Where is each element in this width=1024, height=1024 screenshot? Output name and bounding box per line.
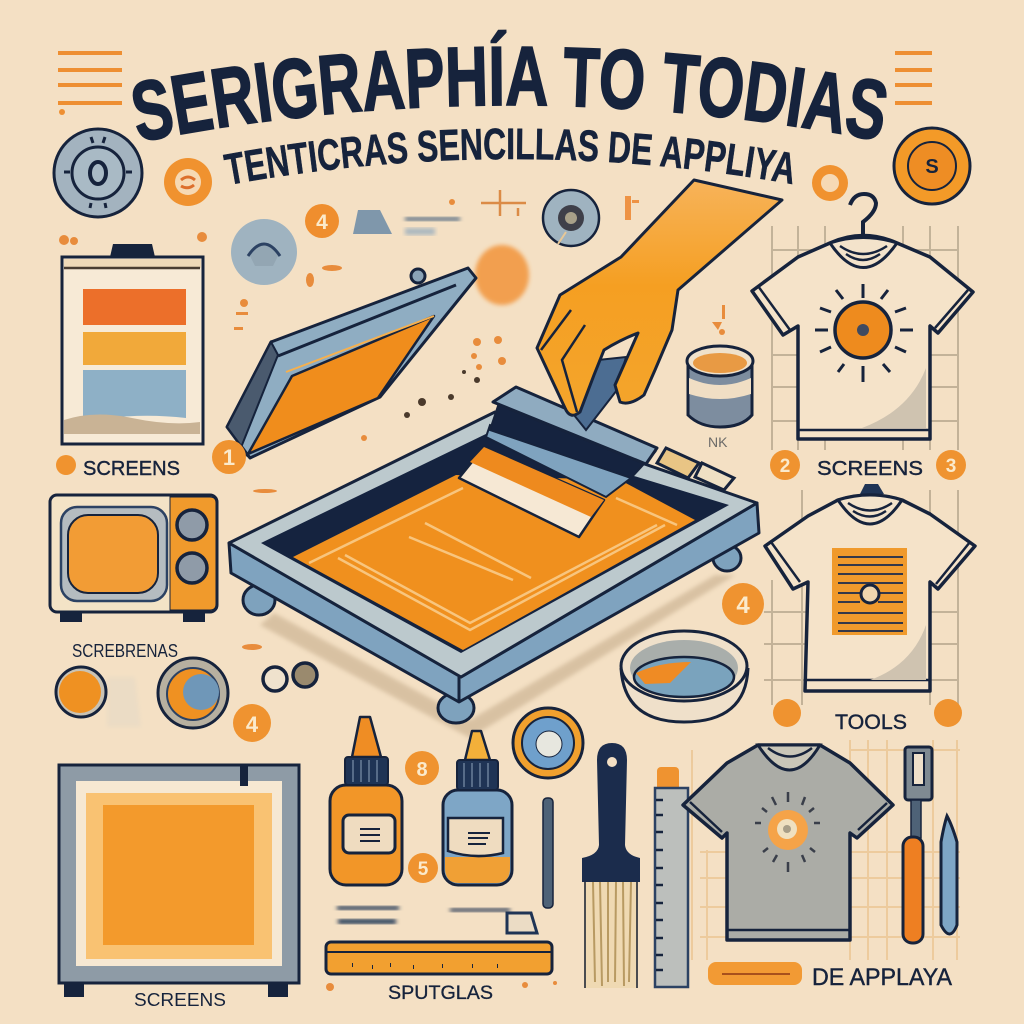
step badge 4 [233, 704, 271, 742]
icon: small clamp [353, 210, 460, 235]
dark specks [404, 370, 480, 418]
step badge 4 top: 4 [316, 211, 328, 234]
icon: small rings [263, 663, 317, 691]
icons: tape rolls [56, 658, 228, 728]
step badge 3: 3 [946, 456, 956, 477]
label: tools: TOOLS [835, 711, 907, 734]
panel: t-shirt with sun [752, 194, 973, 439]
icon: blue bottle [443, 731, 512, 885]
step badge 2: 2 [780, 456, 790, 477]
step badge 4 right: 4 [736, 592, 750, 619]
panel: framed screen [59, 765, 299, 997]
step badge 3 [936, 450, 966, 480]
icon: spiral disc [543, 190, 599, 246]
decorative header lines left [58, 51, 122, 115]
icon: orange bottle [330, 717, 402, 885]
orange blur spot [475, 245, 529, 305]
icon: ink bowl [621, 631, 748, 722]
icon: ink jar: NK [708, 434, 728, 450]
label: screens left [56, 455, 180, 480]
hand [537, 180, 782, 415]
step badge 5 [408, 853, 438, 883]
step badge 1 [212, 440, 246, 474]
panel: tilted screen frame [227, 268, 476, 458]
icon: badge right [812, 165, 848, 201]
step badge 8: 8 [416, 759, 428, 781]
panel: t-shirt with stripes [765, 484, 975, 691]
icon: grey disc [231, 219, 297, 285]
label: screbrenas: SCREBRENAS [72, 641, 178, 661]
icon: scraper tool [903, 747, 932, 943]
icon: exposure unit [50, 495, 217, 622]
panel: colour swatch board [62, 244, 203, 444]
icon: small arrow [625, 196, 639, 220]
panel: main press [229, 412, 759, 723]
label: sputglas: SPUTGLAS [388, 983, 493, 1004]
step badge 4 top [305, 204, 339, 238]
icon: small crosshair [449, 190, 526, 216]
step badge 2 [770, 450, 800, 480]
label: screens left: SCREENS [83, 458, 180, 480]
press shadow [260, 575, 735, 738]
icon: spatula [326, 906, 552, 974]
icon: ruler [655, 767, 688, 987]
subtitle: TENTICRAS SENCILLAS DE APPLIYA [222, 128, 792, 184]
icon: tape ring and rod [513, 708, 583, 908]
step badge 4 right [722, 583, 764, 625]
label: screens right: SCREENS [817, 458, 923, 480]
icon: dial left [54, 129, 142, 217]
step badge 5: 5 [418, 859, 429, 880]
step badge 1: 1 [223, 445, 235, 470]
icon: badge left [164, 158, 212, 206]
icon: brush [582, 743, 640, 988]
squeegee handle [570, 357, 626, 430]
step badge 8 [405, 751, 439, 785]
icon: dial right: S [925, 156, 939, 178]
icon: ink jar [687, 346, 753, 450]
label: screens bottom: SCREENS [134, 990, 226, 1010]
paint splatter [59, 232, 725, 991]
icon: pen tool [941, 816, 957, 934]
icon: dial right [894, 128, 970, 204]
step badge 4: 4 [246, 712, 259, 737]
label: tools [773, 699, 962, 734]
panel: grey t-shirt [683, 745, 893, 940]
squeegee [459, 387, 734, 537]
decorative header lines right [895, 51, 932, 105]
title: SERIGRAPHÍA TO TODIAS [132, 30, 887, 140]
label: de applaya: DE APPLAYA [812, 964, 952, 991]
background grids behind shirts [692, 226, 960, 960]
label: de applaya [708, 962, 952, 991]
